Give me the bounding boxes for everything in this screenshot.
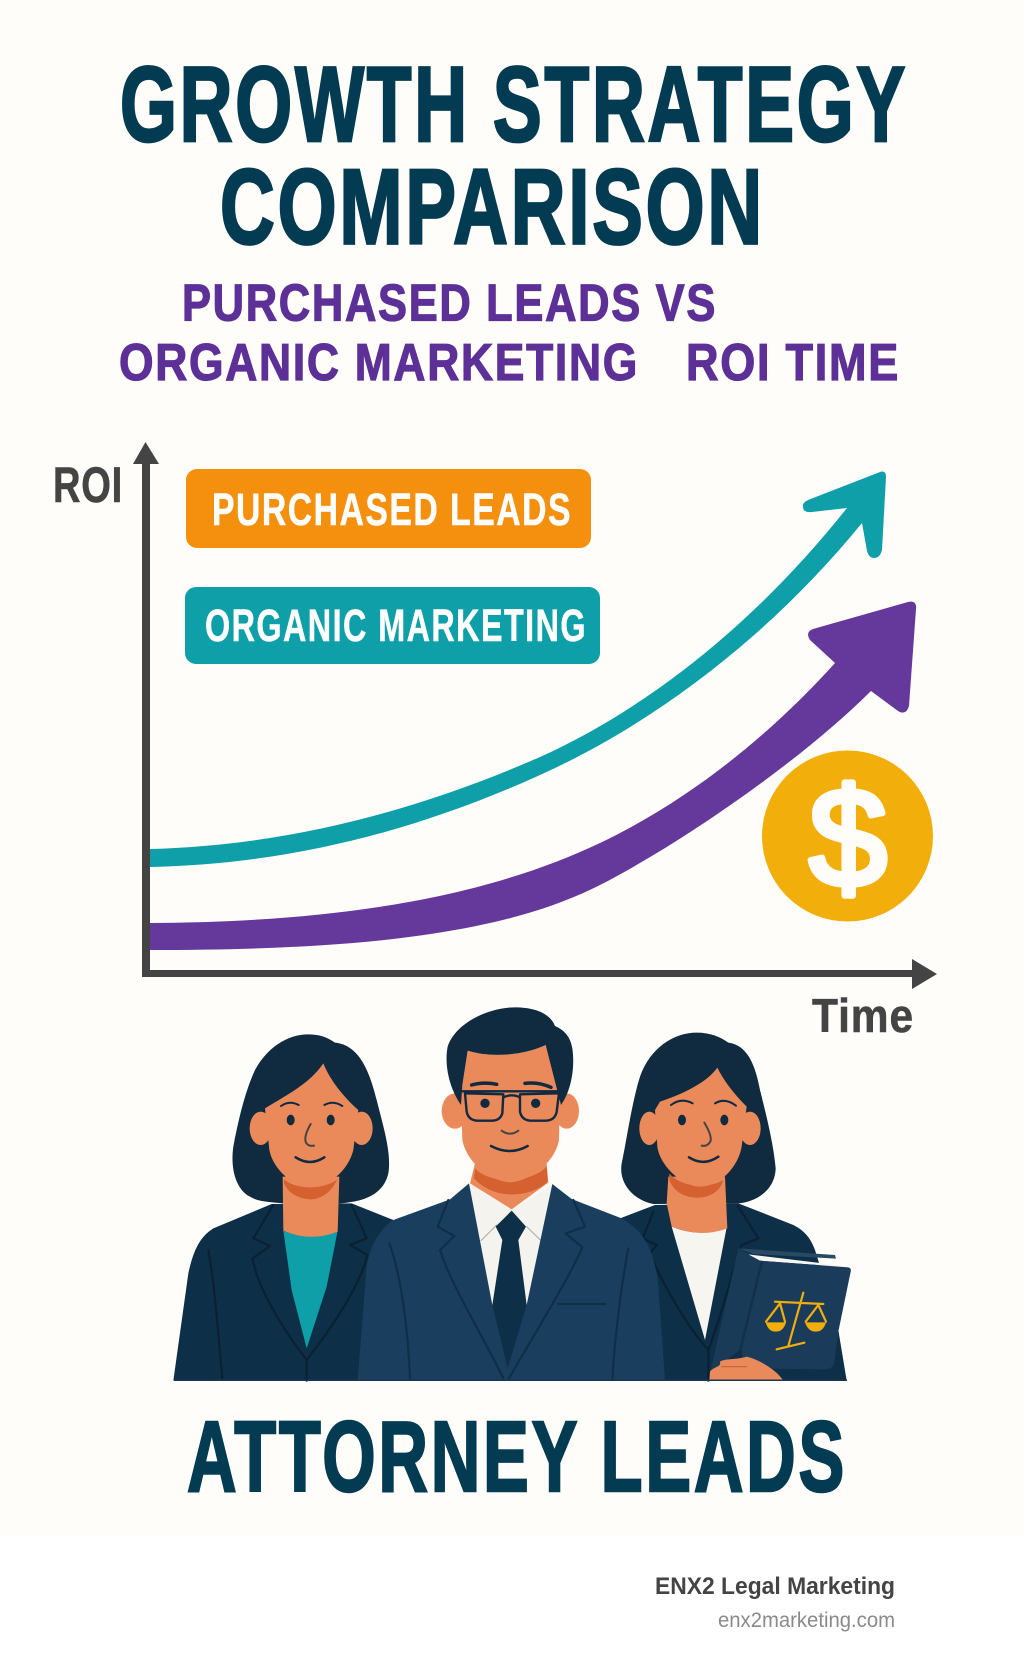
footer: website: enx2marketing.com	[718, 1609, 895, 1632]
footer: brand name: ENX2 Legal Marketing	[655, 1573, 895, 1600]
title: COMPARISON	[220, 146, 765, 266]
subtitle	[119, 274, 900, 392]
attorney: right woman	[610, 1033, 847, 1381]
chart: ROI over time	[53, 442, 937, 1042]
legend: organic marketing: ORGANIC MARKETING	[205, 600, 587, 651]
y axis with arrow	[133, 442, 159, 977]
legend: organic marketing	[185, 587, 600, 664]
attorney: center man	[358, 1007, 665, 1381]
illustration: three attorneys	[173, 1007, 851, 1381]
icon: law book with scales	[710, 1248, 851, 1373]
icon: dollar coin: $	[809, 759, 887, 916]
title	[120, 44, 908, 266]
teal growth arrow	[150, 472, 886, 867]
purple growth arrow	[150, 602, 916, 950]
hand holding book	[709, 1357, 783, 1381]
subtitle: ROI TIME	[686, 334, 900, 392]
subtitle: ORGANIC MARKETING	[119, 334, 639, 392]
attorney: left woman	[173, 1034, 393, 1381]
subtitle: PURCHASED LEADS VS	[182, 274, 717, 332]
base line	[174, 1380, 847, 1381]
x axis label: Time	[812, 989, 914, 1042]
x axis with arrow	[142, 959, 937, 989]
icon: dollar coin	[762, 750, 933, 922]
y axis label: ROI	[53, 457, 123, 513]
legend: purchased leads	[186, 469, 591, 548]
legend: purchased leads: PURCHASED LEADS	[212, 484, 572, 535]
